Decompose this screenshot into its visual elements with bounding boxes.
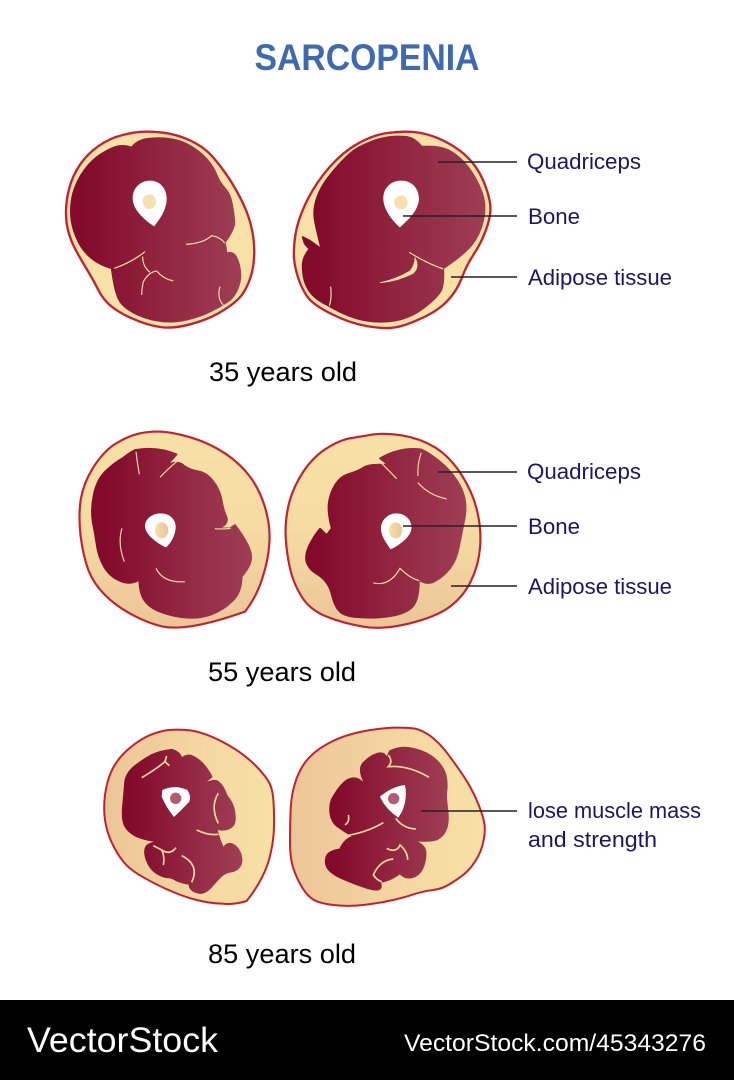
right thigh, 55 years xyxy=(286,434,480,628)
callout: lose muscle mass and strength: and strength xyxy=(528,827,657,852)
footer url: VectorStock.com/45343276 xyxy=(404,1030,706,1057)
callout: lose muscle mass and strength: lose muscle mass xyxy=(528,798,701,823)
title: SARCOPENIA xyxy=(254,37,480,78)
callout: Bone, 35 years: Bone xyxy=(528,204,580,229)
age label: 55 years old: 55 years old xyxy=(208,657,356,687)
right thigh, 35 years xyxy=(294,132,490,328)
left thigh, 85 years xyxy=(104,730,274,904)
panel: 35 years old thigh cross-sections xyxy=(66,132,490,328)
callout: Adipose tissue, 35 years: Adipose tissue xyxy=(528,265,672,290)
callout: Quadriceps, 35 years: Quadriceps xyxy=(527,149,641,174)
panel: 55 years old thigh cross-sections xyxy=(79,432,480,628)
footer logo text: VectorStock xyxy=(27,1021,219,1060)
panel: 85 years old thigh cross-sections xyxy=(104,728,485,906)
age label: 35 years old: 35 years old xyxy=(209,357,357,387)
footer bar xyxy=(0,1000,734,1080)
left thigh, 55 years xyxy=(79,432,270,628)
right thigh, 85 years xyxy=(290,728,485,906)
left thigh, 35 years xyxy=(66,132,254,328)
callout: Bone, 55 years: Bone xyxy=(528,514,580,539)
callout: lose muscle mass and strength xyxy=(421,798,701,852)
age label: 85 years old: 85 years old xyxy=(208,939,356,969)
callout: Adipose tissue, 55 years: Adipose tissue xyxy=(528,574,672,599)
callout: Quadriceps, 55 years: Quadriceps xyxy=(527,459,641,484)
